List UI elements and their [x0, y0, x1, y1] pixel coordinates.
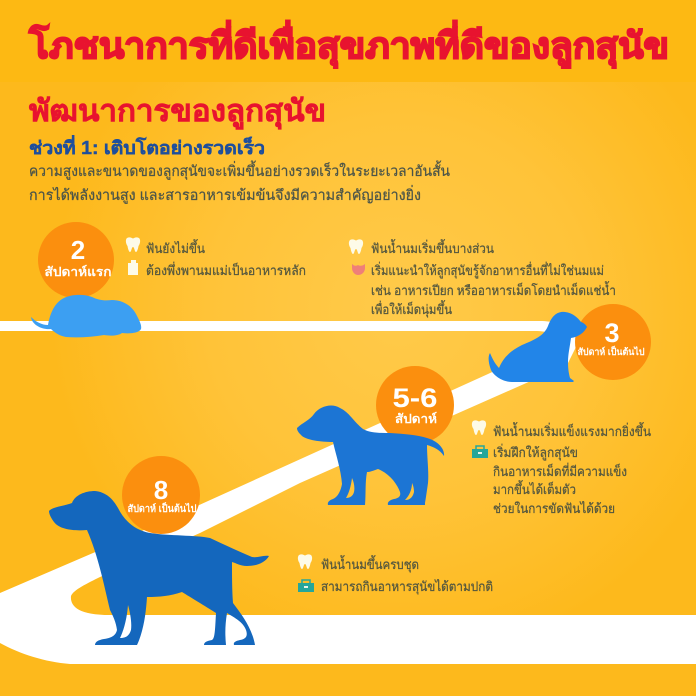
- dog: 5-6 week puppy: [297, 406, 444, 505]
- info list: 5-6 weeks: เริ่มฝึกให้ลูกสุนัข: [493, 444, 578, 461]
- badge: 5-6 weeks: [376, 366, 454, 444]
- info list: 3 weeks: เริ่มแนะนำให้ลูกสุนัขรู้จักอาหารอื่นที่ไม่ใช่นมแม่: [371, 262, 604, 279]
- badge: 3 weeks: 3: [604, 318, 620, 348]
- icon: tooth: [349, 239, 363, 254]
- info list: 3 weeks: [349, 239, 616, 318]
- info list: 3 weeks: ฟันน้ำนมเริ่มขึ้นบางส่วน: [371, 239, 494, 256]
- info list: 3 weeks: เช่น อาหารเปียก หรืออาหารเม็ดโดยนำเม็ดแช่น้ำ: [371, 281, 616, 298]
- white growth path: [0, 321, 696, 664]
- dog: 8 week adult-size puppy: [49, 491, 269, 645]
- icon: tooth: [126, 237, 140, 252]
- intro paragraph: ความสูงและขนาดของลูกสุนัขจะเพิ่มขึ้นอย่างรวดเร็วในระยะเวลาอันสั้น: [29, 160, 450, 180]
- info list: 2 weeks: ฟันยังไม่ขึ้น: [146, 239, 205, 256]
- info list: 8 weeks: [298, 554, 493, 595]
- badge: 2 weeks: [38, 222, 114, 298]
- info list: 5-6 weeks: ฟันน้ำนมเริ่มแข็งแรงมากยิ่งขึ้น: [493, 422, 651, 439]
- badge: 3 weeks: [575, 304, 651, 380]
- badge: 8 weeks: สัปดาห์ เป็นต้นไป: [128, 501, 196, 515]
- info list: 2 weeks: [126, 237, 306, 278]
- heading: puppy development: พัฒนาการของลูกสุนัข: [29, 95, 326, 130]
- info list: 5-6 weeks: ช่วยในการขัดฟันได้ด้วย: [493, 501, 615, 516]
- icon: tooth: [298, 554, 312, 569]
- subheading: phase 1: ช่วงที่ 1: เติบโตอย่างรวดเร็ว: [29, 135, 265, 158]
- icon: tooth: [472, 420, 486, 435]
- info list: 8 weeks: สามารถกินอาหารสุนัขได้ตามปกติ: [321, 579, 493, 595]
- info list: 5-6 weeks: [472, 420, 651, 516]
- dog: newborn puppy: [31, 295, 141, 337]
- icon: food bowl: [352, 264, 365, 275]
- icon: milk bottle: [128, 260, 138, 275]
- badge: 5-6 weeks: 5-6: [392, 383, 438, 413]
- badge: 2 weeks: สัปดาห์แรก: [44, 264, 112, 279]
- info list: 8 weeks: ฟันน้ำนมขึ้นครบชุด: [321, 555, 419, 573]
- badge: 8 weeks: [122, 456, 200, 534]
- info list: 3 weeks: เพื่อให้เม็ดนุ่มขึ้น: [371, 300, 452, 318]
- icon: pet food bag: [472, 446, 488, 458]
- badge: 3 weeks: สัปดาห์ เป็นต้นไป: [578, 345, 644, 358]
- badge: 5-6 weeks: สัปดาห์: [395, 411, 437, 426]
- dog: sitting 3 week puppy: [489, 312, 587, 382]
- info list: 2 weeks: ต้องพึ่งพานมแม่เป็นอาหารหลัก: [146, 261, 306, 278]
- intro paragraph: [29, 160, 450, 204]
- icon: pet food bag: [298, 580, 314, 592]
- info list: 5-6 weeks: กินอาหารเม็ดที่มีความแข็ง: [493, 462, 627, 479]
- title: โภชนาการที่ดีเพื่อสุขภาพที่ดีของลูกสุนัข: [28, 20, 669, 69]
- intro paragraph: การได้พลังงานสูง และสารอาหารเข้มข้นจึงมีความสำคัญอย่างยิ่ง: [29, 185, 421, 204]
- info list: 5-6 weeks: มากขึ้นได้เต็มตัว: [493, 480, 576, 497]
- badge: 8 weeks: 8: [154, 475, 168, 505]
- badge: 2 weeks: 2: [71, 235, 85, 265]
